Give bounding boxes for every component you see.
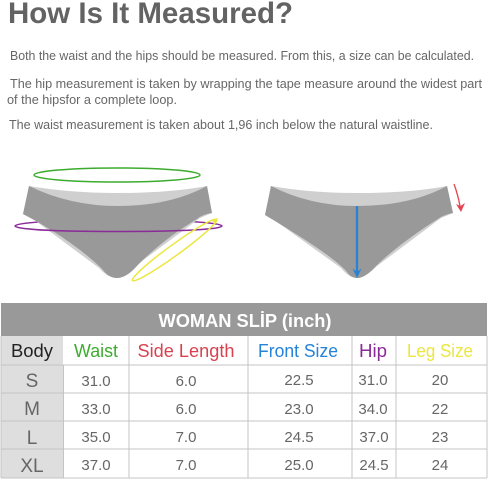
- table values: 31.0: [81, 373, 111, 390]
- intro text block: Both the waist and the hips should be measured. From this, a size can be calculated.: [10, 48, 474, 63]
- table values: 24.5: [284, 429, 314, 446]
- slip back lining: [23, 186, 212, 278]
- table values: 20: [432, 372, 448, 389]
- diagram: slip with waist, hip and leg loops: [15, 168, 222, 285]
- slip front: [23, 186, 212, 278]
- leg loop: [129, 215, 220, 285]
- table header: WOMAN SLİP (inch): [158, 311, 332, 331]
- intro text block: The waist measurement is taken about 1,96 inch below the natural waistline.: [9, 117, 433, 132]
- intro text block: [7, 48, 482, 132]
- column headings: Hip: [359, 341, 387, 361]
- column headings: Front Size: [258, 341, 338, 361]
- table values: 37.0: [359, 429, 389, 446]
- table values: 23.0: [284, 401, 314, 418]
- size labels: S: [26, 371, 38, 392]
- column headings: Leg Size: [407, 341, 473, 361]
- table values: 22: [432, 401, 448, 418]
- body column background: [1, 336, 63, 478]
- column headings: Waist: [74, 341, 118, 361]
- size table: [1, 303, 487, 478]
- table values: 23: [432, 429, 448, 446]
- table values: 7.0: [176, 429, 196, 446]
- size labels: XL: [20, 456, 44, 477]
- table grid: [1, 336, 487, 478]
- size labels: L: [27, 428, 37, 449]
- table values: 7.0: [176, 457, 196, 474]
- size labels: M: [24, 399, 40, 420]
- table values: 25.0: [284, 457, 314, 474]
- table values: 22.5: [284, 372, 314, 389]
- diagram: slip with side and front arrows: [265, 184, 465, 278]
- table values: 6.0: [176, 401, 196, 418]
- table values: 6.0: [176, 373, 196, 390]
- table values: 24: [432, 457, 448, 474]
- table values: 35.0: [81, 429, 111, 446]
- size labels: [20, 371, 44, 477]
- column headings: Side Length: [138, 341, 234, 361]
- column headings: Body: [11, 341, 53, 361]
- waist loop: [34, 168, 200, 182]
- table values: 24.5: [359, 457, 389, 474]
- table header: [1, 303, 487, 336]
- slip front: [265, 186, 453, 278]
- table values: 37.0: [81, 457, 111, 474]
- hip loop front arc: [15, 226, 222, 232]
- column headings: [11, 341, 473, 361]
- hip loop back arc: [15, 220, 222, 226]
- side length arrow: [454, 184, 465, 212]
- table values: 31.0: [358, 372, 388, 389]
- table values: [81, 372, 448, 474]
- intro text block: The hip measurement is taken by wrapping the tape measure around the widest part: [10, 76, 482, 91]
- table values: 33.0: [81, 401, 111, 418]
- front size arrow: [352, 206, 362, 278]
- intro text block: of the hipsfor a complete loop.: [7, 92, 177, 107]
- table values: 34.0: [358, 401, 388, 418]
- slip back lining: [265, 186, 453, 278]
